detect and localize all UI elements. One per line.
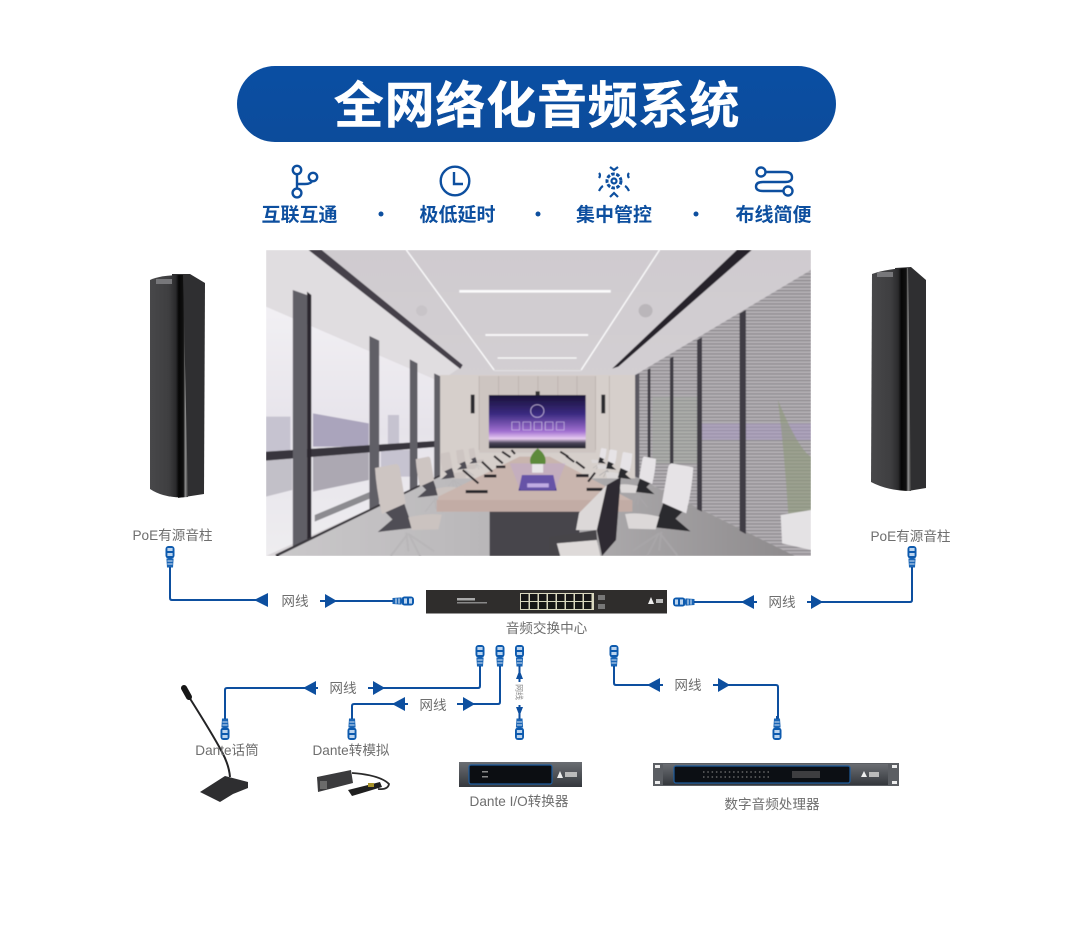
- network switch: [426, 590, 667, 614]
- feature: 布线简便: 布线简便: [735, 204, 812, 226]
- conference room photo: [266, 250, 811, 556]
- icon: simple cabling: [756, 168, 792, 196]
- cable: switch to Dante I/O: [514, 645, 524, 740]
- feature: 集中管控: 集中管控: [576, 203, 652, 226]
- label: Dante analog converter: Dante转模拟: [312, 743, 390, 758]
- cable: left speaker to switch: 网线: [281, 594, 309, 609]
- Dante microphone: [184, 688, 248, 802]
- Dante analog converter: [317, 770, 389, 796]
- cable: switch to Dante I/O: 网线: [514, 684, 524, 700]
- title banner: 全网络化音频系统: [334, 78, 740, 134]
- ceiling light strips: [406, 250, 660, 371]
- separator dot: [378, 212, 384, 216]
- cable: switch to Dante microphone: [220, 645, 484, 740]
- cable: left speaker to switch: [166, 546, 414, 609]
- label: digital audio processor: 数字音频处理器: [724, 796, 820, 812]
- back wall: [440, 375, 635, 478]
- cable: right speaker to switch: [673, 546, 916, 610]
- table base: [490, 510, 579, 556]
- cable: switch to Dante analog converter: 网线: [419, 698, 447, 713]
- feature row: [261, 166, 812, 226]
- label: Dante I/O: Dante I/O转换器: [470, 794, 569, 809]
- ceiling dark troughs: [308, 250, 752, 369]
- label: Dante microphone: Dante话筒: [195, 742, 259, 758]
- right PoE column speaker: [871, 267, 926, 491]
- label: audio switch: 音频交换中心: [506, 620, 588, 636]
- digital audio processor: [653, 763, 899, 786]
- wall display: [471, 391, 605, 448]
- cable: switch to DSP: 网线: [674, 678, 702, 693]
- right blinds wall: [635, 270, 811, 556]
- far-side chairs: [416, 448, 656, 512]
- ceiling: [266, 250, 811, 556]
- conference table: [437, 448, 632, 512]
- feature: 极低延时: 极低延时: [419, 204, 496, 226]
- icon: interconnect branch: [293, 166, 317, 197]
- cable: right speaker to switch: 网线: [768, 595, 796, 610]
- separator dot: [694, 212, 698, 216]
- icon: clock: [441, 167, 469, 195]
- icon: centralized control gear: [599, 167, 629, 197]
- label: left speaker: PoE有源音柱: [132, 527, 213, 543]
- left window wall: [266, 290, 441, 556]
- Dante I/O converter: [459, 762, 582, 787]
- left PoE column speaker: [150, 274, 205, 498]
- table microphones: [463, 450, 602, 493]
- title banner: [237, 66, 836, 142]
- label: right speaker: PoE有源音柱: [870, 528, 951, 544]
- floor: [278, 477, 795, 556]
- cable: switch to Dante analog converter: [348, 645, 504, 740]
- foreground chairs: [375, 463, 693, 557]
- cable: switch to DSP: [610, 645, 782, 740]
- cable: switch to Dante microphone: 网线: [329, 681, 357, 696]
- separator dot: [536, 212, 540, 216]
- feature: 互联互通: 互联互通: [261, 204, 338, 226]
